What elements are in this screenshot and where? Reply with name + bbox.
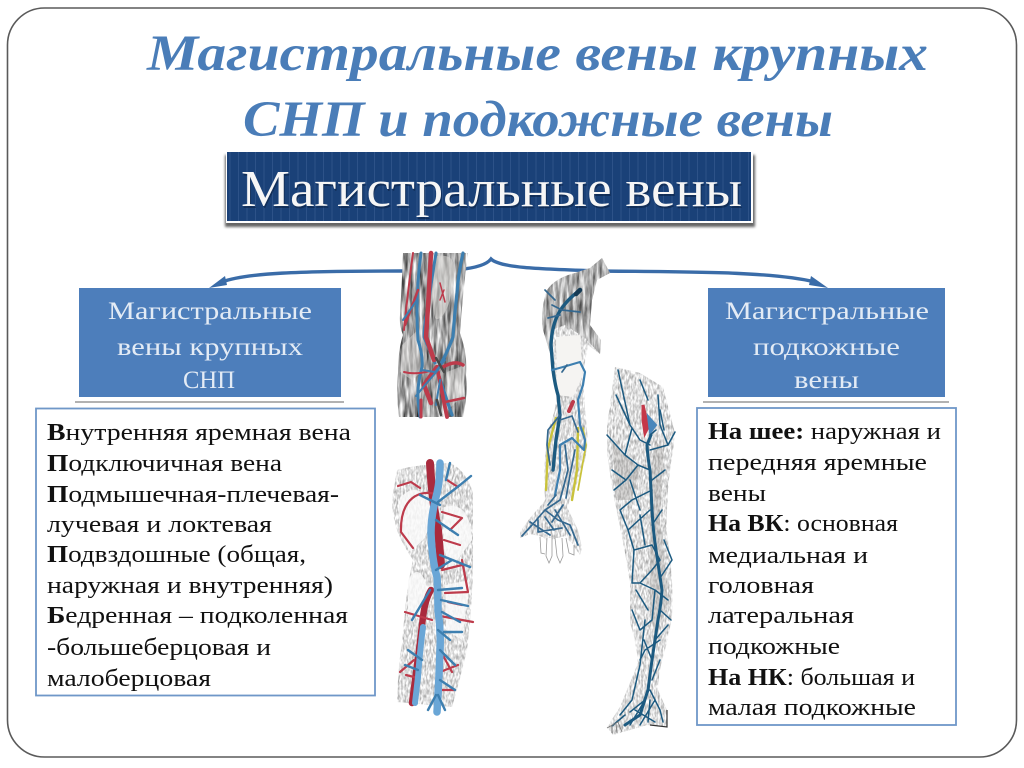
text box: large vessels: Подключичная вена [47,451,282,477]
illustration: arm superficial veins [520,258,610,563]
illustration: leg superficial veins [607,367,675,735]
text box: subcutaneous veins: На шее: наружная и [708,419,941,445]
banner: магистральные вены [225,151,755,227]
text box: large vessels: малоберцовая [47,666,211,692]
panel heading: left: Магистральные [108,296,312,325]
text box: subcutaneous veins: подкожные [708,634,840,660]
text box: large vessels: Бедренная – подколенная [47,603,348,629]
text box: subcutaneous veins: На НК: большая и [708,665,915,691]
text box: subcutaneous veins: передняя яремные [708,450,927,476]
panel heading: left: СНП [183,365,235,394]
illustration: thigh dissection [392,463,473,712]
title: Магистральные вены крупных [146,26,928,82]
panel heading: right [703,288,949,402]
text box: large vessels [36,408,375,696]
text box: subcutaneous veins: На ВК: основная [708,511,898,537]
illustration: elbow dissection [397,253,468,417]
text box: subcutaneous veins: малая подкожные [708,695,916,721]
text box: subcutaneous veins: латеральная [708,603,854,629]
text box: large vessels: Подмышечная-плечевая- [47,482,339,508]
title [146,26,928,148]
panel heading: left [75,288,344,402]
text box: subcutaneous veins: вены [708,481,766,507]
text box: large vessels: Подвздошные (общая, [47,542,306,568]
text box: subcutaneous veins [697,408,956,725]
text box: large vessels: наружная и внутренняя) [47,573,333,599]
text box: large vessels: -большеберцовая и [47,635,271,661]
text box: subcutaneous veins: головная [708,573,814,599]
panel heading: right: Магистральные [725,296,929,325]
panel heading: right: подкожные [753,332,900,361]
text box: large vessels: Внутренняя яремная вена [47,420,351,446]
title: СНП и подкожные вены [243,92,833,148]
panel heading: left: вены крупных [117,332,303,361]
brace arrows [209,259,828,288]
text box: subcutaneous veins: медиальная и [708,543,868,569]
panel heading: right: вены [794,365,859,394]
banner: магистральные вены: Магистральные вены [242,163,743,220]
banner: магистральные вены: Магистральные вены [241,161,742,218]
text box: large vessels: лучевая и локтевая [47,512,272,538]
